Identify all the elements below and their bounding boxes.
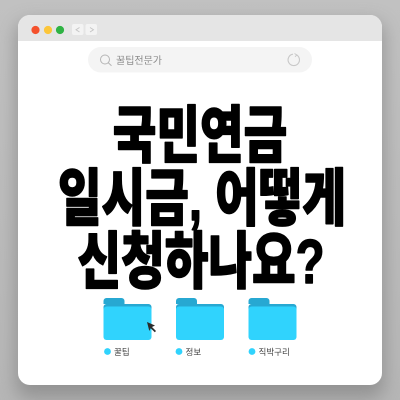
label: 직박구리: 직박구리 — [258, 347, 290, 357]
title bar — [18, 15, 382, 41]
folder: 정보 — [176, 298, 224, 340]
folder: 직박구리 — [248, 298, 296, 340]
icon: magnifier — [100, 55, 112, 66]
label: 꿀팁: 꿀팁 — [114, 347, 130, 357]
title line 3: 신청하나요? — [77, 227, 325, 296]
icon: navigation arrows — [72, 24, 97, 35]
title line 2: 일시금, 어떻게 — [58, 164, 346, 233]
search bar — [88, 47, 312, 72]
label: 꿀팁 — [104, 347, 130, 357]
search text: 꿀팁전문가 — [116, 55, 162, 67]
title line 1: 국민연금 — [113, 101, 287, 170]
title — [58, 101, 346, 296]
icon: cursor — [147, 322, 156, 332]
label: 정보: 정보 — [186, 347, 201, 357]
icon: window controls — [31, 26, 64, 34]
label: 정보 — [176, 347, 201, 357]
icon: reload — [288, 54, 299, 66]
folder: 꿀팁 — [104, 298, 152, 340]
